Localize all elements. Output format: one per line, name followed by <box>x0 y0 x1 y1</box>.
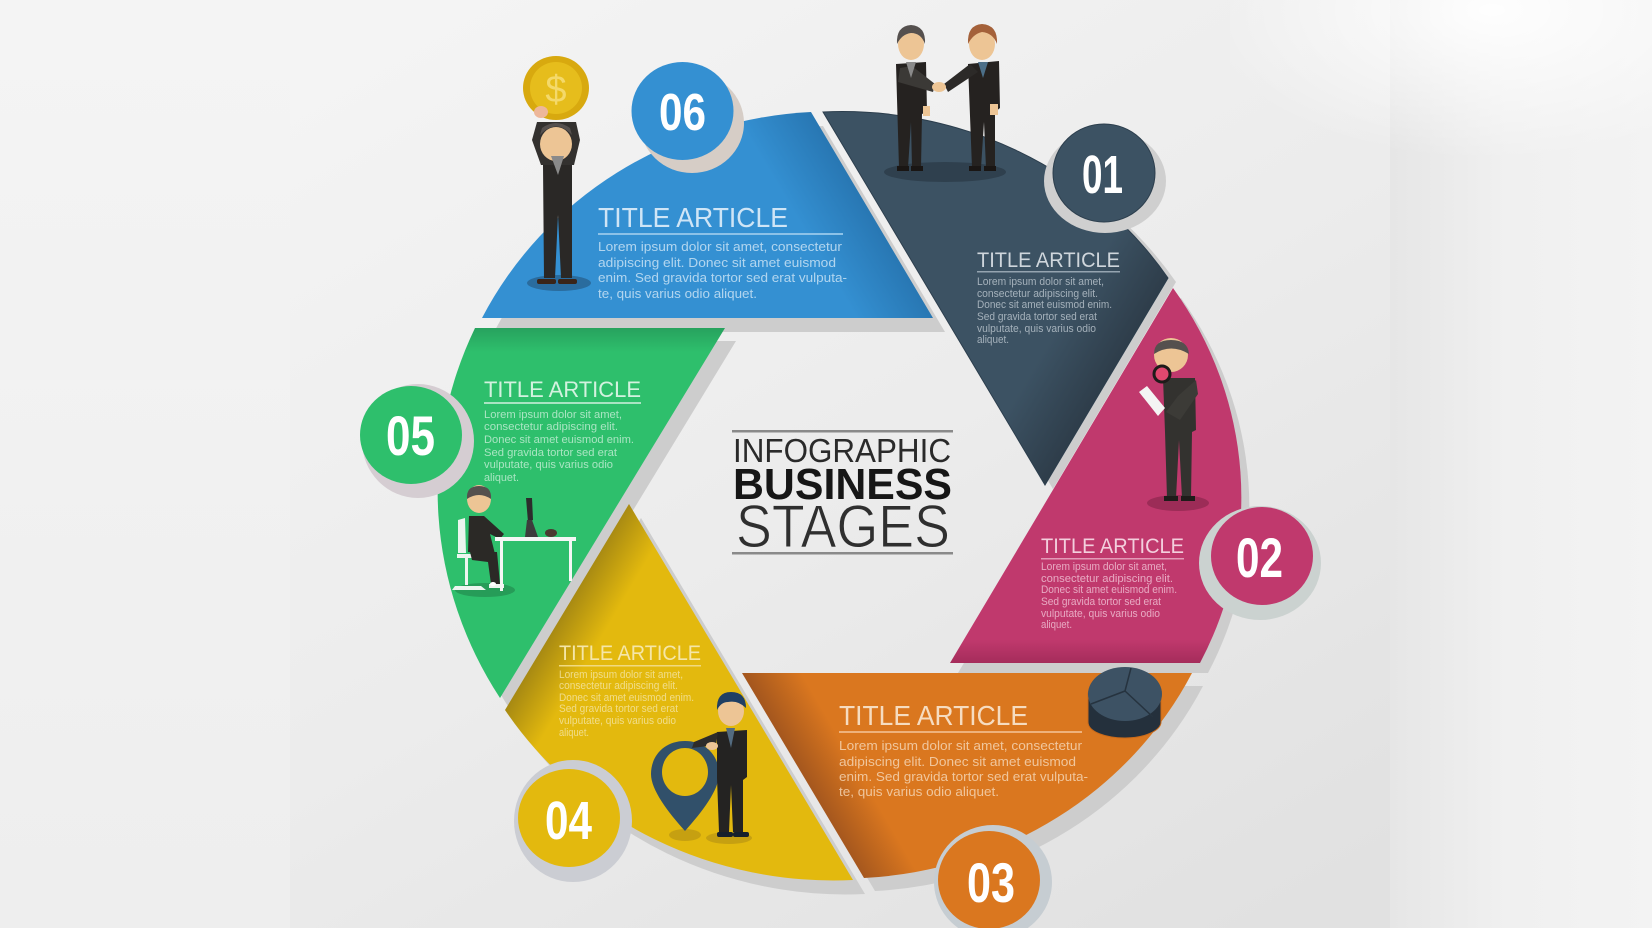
segment drop shadows <box>449 116 1249 894</box>
body 05: consectetur adipiscing elit. <box>484 421 618 433</box>
segment 01: dark slate <box>823 112 1168 485</box>
body 04: aliquet. <box>559 727 589 739</box>
body 04 <box>559 669 694 739</box>
body 06: te, quis varius odio aliquet. <box>598 286 757 301</box>
body 01: consectetur adipiscing elit. <box>977 288 1098 300</box>
body 06: enim. Sed gravida tortor sed erat vulputa- <box>598 270 847 285</box>
title 05: TITLE ARTICLE <box>484 377 641 402</box>
body 01: vulputate, quis varius odio <box>977 323 1096 335</box>
title 04: TITLE ARTICLE <box>559 642 701 665</box>
badge 06 <box>632 62 744 173</box>
center title: INFOGRAPHIC <box>733 432 951 469</box>
body 01: Donec sit amet euismod enim. <box>977 299 1112 311</box>
body 05: aliquet. <box>484 472 519 484</box>
title 06: TITLE ARTICLE <box>598 202 788 233</box>
title 02: TITLE ARTICLE <box>1041 535 1184 558</box>
body 04: Lorem ipsum dolor sit amet, <box>559 669 683 681</box>
body 05: Sed gravida tortor sed erat <box>484 447 617 459</box>
body 05: Donec sit amet euismod enim. <box>484 434 634 446</box>
segment 04: yellow <box>505 504 853 880</box>
badge 04: 04 <box>545 791 592 851</box>
badge 04 <box>514 760 632 882</box>
body 03: enim. Sed gravida tortor sed erat vulputa- <box>839 769 1088 784</box>
body 02: consectetur adipiscing elit. <box>1041 573 1173 585</box>
segment 05: green <box>438 328 725 698</box>
body 02 <box>1041 561 1177 631</box>
body 06: adipiscing elit. Donec sit amet euismod <box>598 255 836 270</box>
icon: gold coin: $ <box>545 69 567 111</box>
segment 06: blue <box>482 112 933 318</box>
title 03: TITLE ARTICLE <box>839 700 1028 731</box>
title 01: TITLE ARTICLE <box>977 249 1120 272</box>
body 02: aliquet. <box>1041 619 1072 631</box>
segment 03: orange <box>742 673 1192 878</box>
body 01: Sed gravida tortor sed erat <box>977 311 1097 323</box>
body 02: Donec sit amet euismod enim. <box>1041 584 1177 596</box>
figure: man at desk with computer <box>452 485 576 597</box>
figure: man with magnifier and paper <box>1139 338 1209 511</box>
body 04: Donec sit amet euismod enim. <box>559 692 694 704</box>
body 06 <box>598 239 847 301</box>
body 05 <box>484 409 634 484</box>
body 05: vulputate, quis varius odio <box>484 459 613 471</box>
icon: gold coin <box>523 56 589 120</box>
center title <box>732 430 953 560</box>
body 04: consectetur adipiscing elit. <box>559 680 678 692</box>
body 03 <box>839 738 1088 799</box>
center title: STAGES <box>736 493 950 560</box>
badge 02: 02 <box>1236 526 1283 589</box>
center title: BUSINESS <box>733 460 952 509</box>
icon: pie chart cylinder <box>1088 667 1162 738</box>
body 05: Lorem ipsum dolor sit amet, <box>484 409 622 421</box>
icon: map pin <box>651 741 719 831</box>
badge 02 <box>1199 506 1321 620</box>
body 04: Sed gravida tortor sed erat <box>559 703 678 715</box>
body 01: Lorem ipsum dolor sit amet, <box>977 276 1104 288</box>
figure: man holding gold coin <box>523 56 591 291</box>
body 02: Lorem ipsum dolor sit amet, <box>1041 561 1167 573</box>
figure: two businessmen shaking hands <box>884 24 1006 182</box>
body 03: te, quis varius odio aliquet. <box>839 784 999 799</box>
badge 06: 06 <box>659 84 706 142</box>
badge 03 <box>934 825 1052 928</box>
badge 01: 01 <box>1082 145 1123 205</box>
body 04: vulputate, quis varius odio <box>559 715 676 727</box>
body 03: adipiscing elit. Donec sit amet euismod <box>839 754 1076 769</box>
badge 05: 05 <box>386 404 435 467</box>
body 02: Sed gravida tortor sed erat <box>1041 596 1161 608</box>
segment 02: pink <box>950 288 1241 663</box>
badge 03: 03 <box>967 851 1015 914</box>
body 01 <box>977 276 1112 346</box>
body 02: vulputate, quis varius odio <box>1041 608 1160 620</box>
figure: man with map pin <box>651 692 752 844</box>
badge 05 <box>360 384 474 498</box>
body 03: Lorem ipsum dolor sit amet, consectetur <box>839 738 1083 753</box>
body 01: aliquet. <box>977 334 1009 346</box>
badge 01 <box>1044 124 1166 233</box>
body 06: Lorem ipsum dolor sit amet, consectetur <box>598 239 843 254</box>
